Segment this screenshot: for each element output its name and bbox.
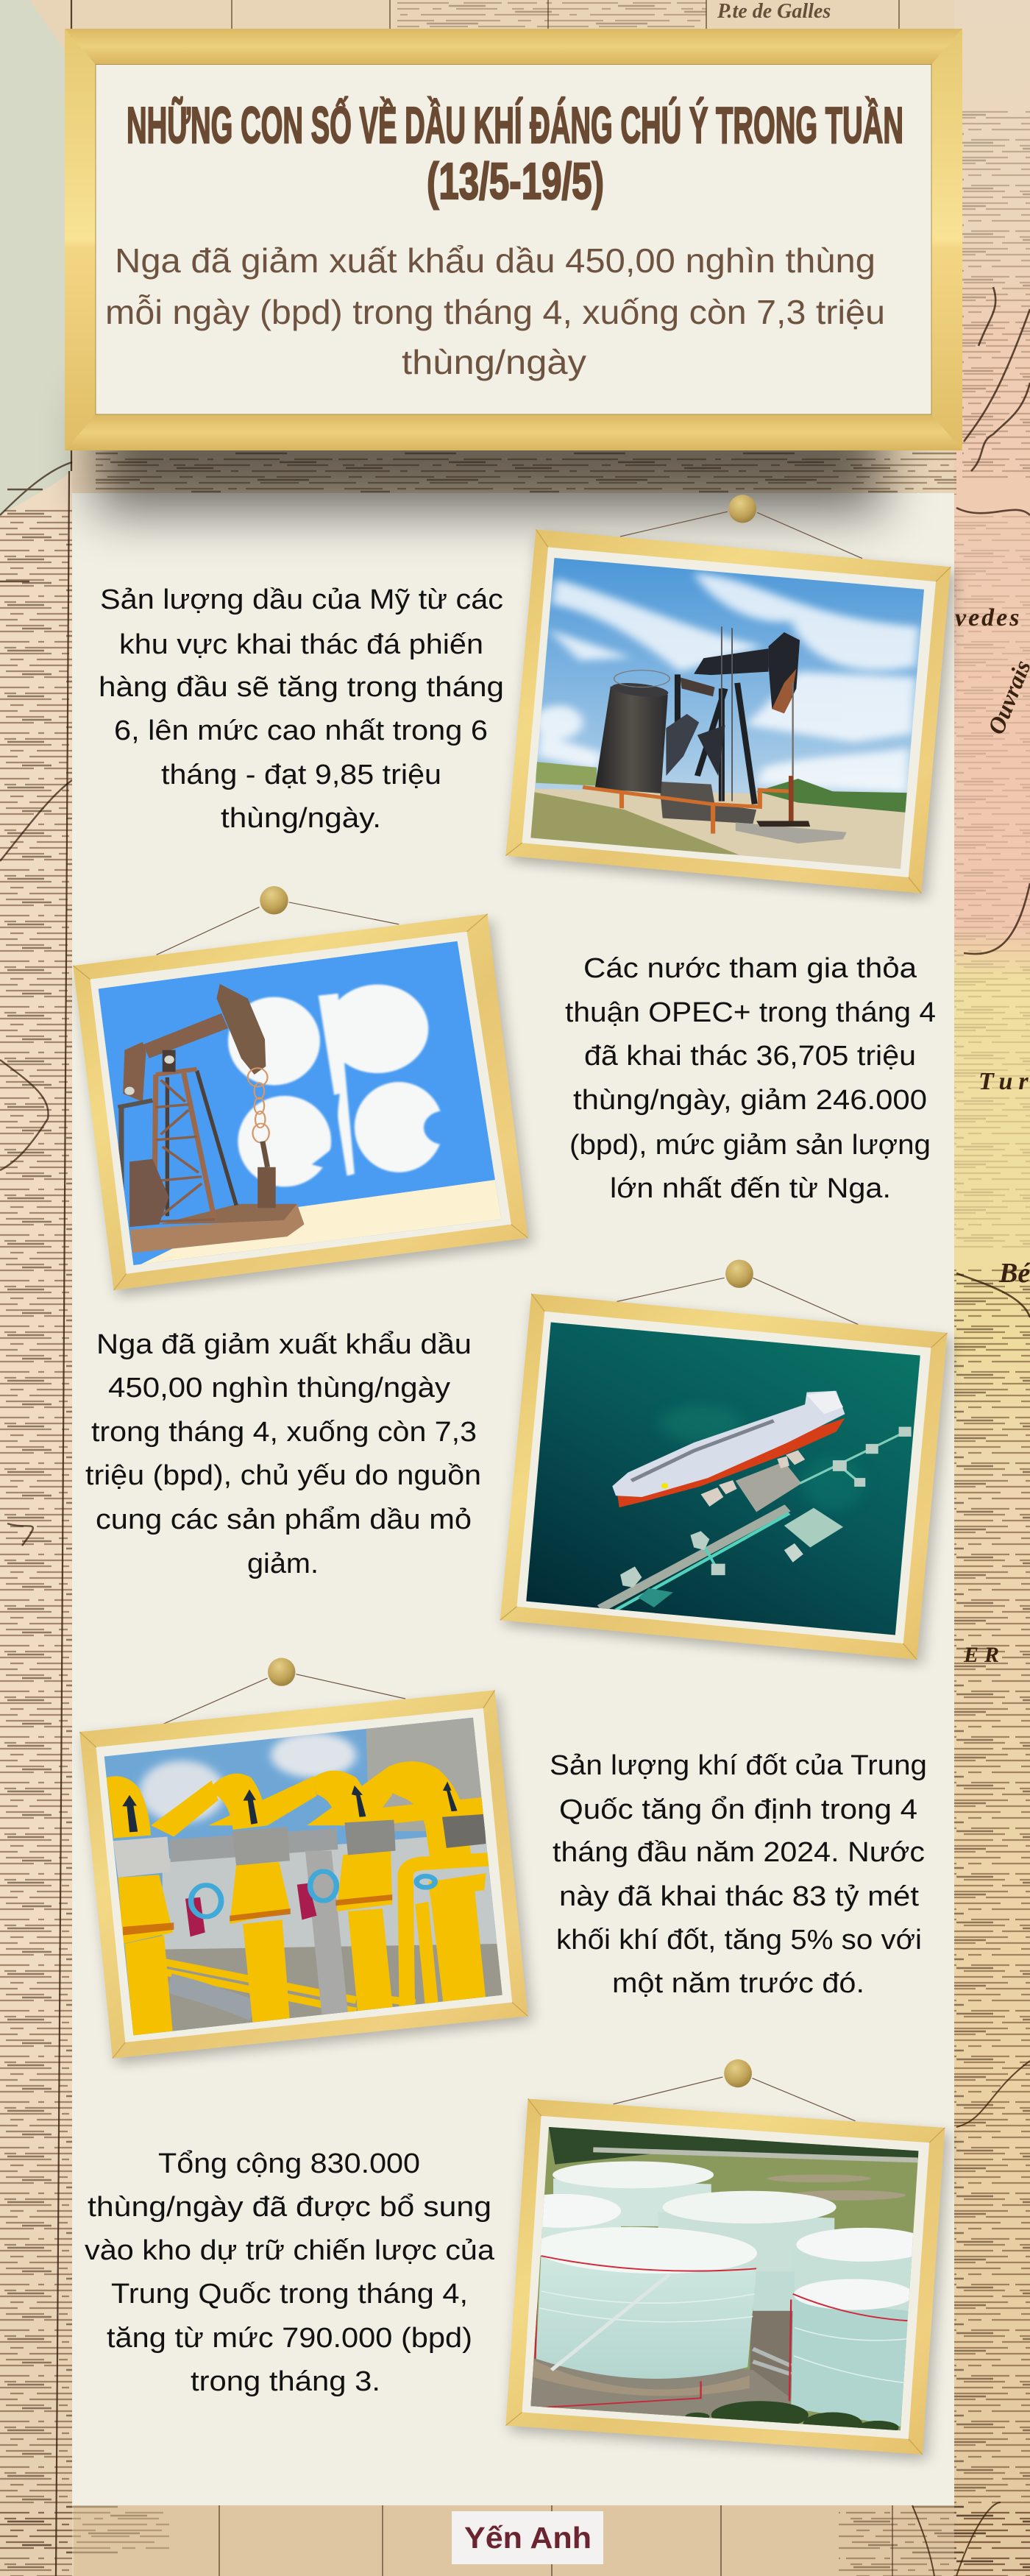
photo frame 2: OPEC logo bbox=[73, 886, 532, 1296]
text block: China gas output: khối khí đốt, tăng 5% so với bbox=[556, 1925, 922, 1956]
string and pin bbox=[163, 1658, 405, 1724]
text block: US shale output: hàng đầu sẽ tăng trong tháng bbox=[99, 672, 504, 703]
header shadow bbox=[96, 397, 883, 512]
photo frame 5: storage tanks bbox=[503, 2059, 949, 2460]
text block: US shale output: tháng - đạt 9,85 triệu bbox=[161, 760, 441, 790]
subtitle bbox=[105, 241, 885, 381]
text block: US shale output bbox=[99, 584, 504, 834]
panel: content sheet bbox=[72, 493, 954, 2505]
author badge: Yến Anh bbox=[464, 2521, 592, 2555]
text block: OPEC+ output: thùng/ngày, giảm 246.000 bbox=[573, 1085, 927, 1116]
photo frame 3: tanker bbox=[500, 1259, 951, 1665]
text block: China strategic reserve: tăng từ mức 790.000 (bpd) bbox=[107, 2323, 472, 2354]
text block: China gas output: Quốc tăng ổn định trong 4 bbox=[559, 1794, 917, 1825]
text block: US shale output: khu vực khai thác đá phiến bbox=[119, 629, 483, 660]
string and pin bbox=[617, 1259, 858, 1324]
text block: Russia oil export: triệu (bpd), chủ yếu do nguồn bbox=[85, 1460, 481, 1491]
photo: oil storage tanks bbox=[530, 2127, 918, 2430]
author badge bbox=[452, 2511, 603, 2564]
panel: header frame bbox=[65, 29, 962, 450]
text block: Russia oil export: 450,00 nghìn thùng/ngày bbox=[108, 1373, 450, 1404]
text block: OPEC+ output: (bpd), mức giảm sản lượng bbox=[569, 1130, 931, 1161]
text block: China strategic reserve: thùng/ngày đã được bổ sung bbox=[88, 2192, 491, 2223]
title: (13/5-19/5) bbox=[427, 152, 604, 210]
text block: Russia oil export: trong tháng 4, xuống còn 7,3 bbox=[91, 1417, 477, 1448]
background: antique map: P.te de Galles bbox=[717, 0, 831, 23]
text block: China strategic reserve: trong tháng 3. bbox=[191, 2366, 380, 2397]
photo frame 1: pumpjack bbox=[505, 495, 955, 899]
text block: China strategic reserve: Trung Quốc trong tháng 4, bbox=[111, 2279, 468, 2310]
photo: yellow pipeline valves bbox=[100, 1713, 507, 2039]
subtitle: thùng/ngày bbox=[402, 343, 586, 381]
subtitle: mỗi ngày (bpd) trong tháng 4, xuống còn 7,3 triệu bbox=[105, 293, 885, 331]
text block: US shale output: 6, lên mức cao nhất trong 6 bbox=[114, 715, 488, 746]
photo: oil pumpjack and tank bbox=[520, 553, 937, 874]
background: antique map: ER bbox=[963, 1643, 1005, 1667]
text block: US shale output: Sản lượng dầu của Mỹ từ các bbox=[100, 584, 503, 615]
text block: OPEC+ output: Các nước tham gia thỏa bbox=[583, 953, 917, 984]
string and pin bbox=[157, 886, 399, 955]
background: antique map: Bé bbox=[998, 1258, 1030, 1289]
title bbox=[127, 96, 903, 210]
text block: Russia oil export: Nga đã giảm xuất khẩu dầu bbox=[96, 1329, 472, 1360]
text block: US shale output: thùng/ngày. bbox=[221, 803, 381, 834]
text block: China gas output: Sản lượng khí đốt của Trung bbox=[550, 1750, 927, 1781]
string and pin bbox=[614, 2059, 856, 2121]
text block: Russia oil export: giảm. bbox=[247, 1549, 319, 1579]
text block: OPEC+ output bbox=[565, 953, 936, 1204]
text block: China gas output: tháng đầu năm 2024. Nước bbox=[553, 1837, 925, 1868]
photo frame 4: yellow gas pipes bbox=[79, 1658, 532, 2064]
background: antique map: vedes bbox=[955, 604, 1022, 631]
text block: China strategic reserve: Tổng cộng 830.000 bbox=[158, 2148, 420, 2179]
text block: China gas output bbox=[550, 1750, 927, 1999]
text block: OPEC+ output: thuận OPEC+ trong tháng 4 bbox=[565, 997, 936, 1028]
text block: Russia oil export bbox=[85, 1329, 481, 1579]
text block: China gas output: này đã khai thác 83 tỷ mét bbox=[559, 1881, 919, 1912]
text block: China strategic reserve: vào kho dự trữ chiến lược của bbox=[85, 2235, 495, 2266]
text block: OPEC+ output: lớn nhất đến từ Nga. bbox=[610, 1173, 891, 1204]
subtitle: Nga đã giảm xuất khẩu dầu 450,00 nghìn thùng bbox=[115, 241, 876, 280]
photo: OPEC logo with miniature pumpjack bbox=[93, 938, 507, 1268]
text block: China gas output: một năm trước đó. bbox=[612, 1968, 864, 1999]
text block: OPEC+ output: đã khai thác 36,705 triệu bbox=[584, 1041, 916, 1072]
text block: China strategic reserve bbox=[85, 2148, 495, 2397]
string and pin bbox=[620, 495, 862, 559]
photo: LNG tanker at jetty bbox=[520, 1317, 926, 1638]
text block: Russia oil export: cung các sản phẩm dầu mỏ bbox=[96, 1504, 472, 1535]
